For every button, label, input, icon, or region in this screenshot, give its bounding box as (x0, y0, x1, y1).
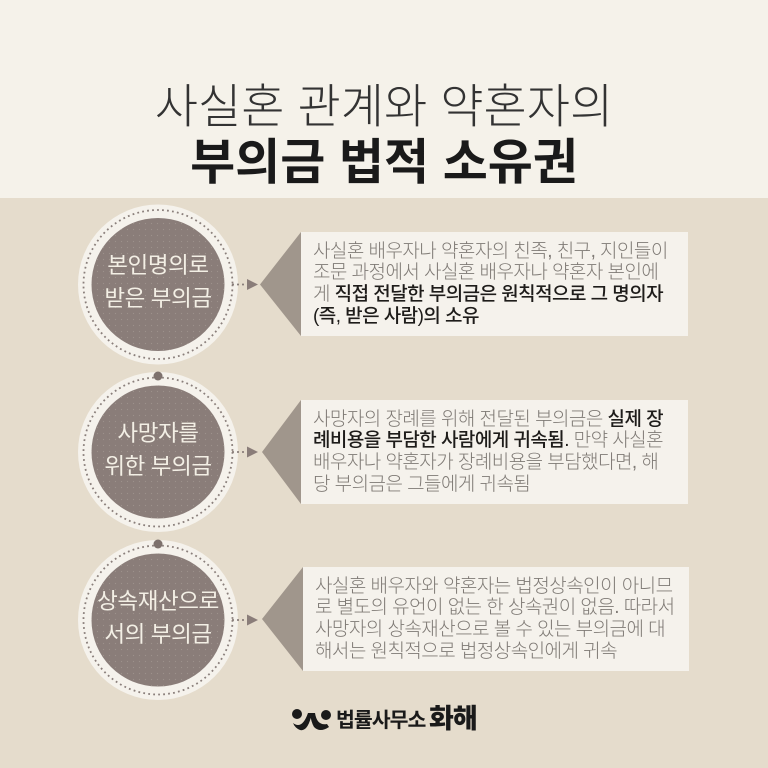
panel 2: 사망자의 장례를 위해 전달된 부의금은 실제 장 (313, 408, 663, 430)
title: 부의금 법적 소유권 (190, 136, 578, 190)
panel 3: 사실혼 배우자와 약혼자는 법정상속인이 아니므 (315, 576, 673, 596)
panel 2 (301, 400, 688, 504)
logo (292, 704, 477, 734)
circle label 3 (97, 589, 219, 647)
panel 2: 배우자나 약혼자가 장례비용을 부담했다면, 해 (313, 452, 658, 473)
title: 사실혼 관계와 약혼자의 (155, 80, 613, 133)
panel 1 (301, 232, 688, 336)
circle 3 (78, 540, 238, 700)
panel 1: (즉, 받은 사람)의 소유 (313, 306, 479, 327)
panel 2: 례비용을 부담한 사람에게 귀속됨. 만약 사실혼 (313, 430, 663, 451)
circle label 1: 본인명의로 (107, 253, 209, 278)
connector 2 (232, 400, 301, 504)
circle label 2: 위한 부의금 (104, 454, 212, 479)
circle label 2: 사망자를 (117, 421, 199, 446)
junction dot 2 (154, 540, 162, 548)
panel 3: 로 별도의 유언이 없는 한 상속권이 없음. 따라서 (315, 597, 675, 618)
circle 1 (78, 204, 238, 364)
icon: logo mark (292, 709, 331, 730)
circle label 1: 받은 부의금 (104, 286, 212, 311)
logo text: 법률사무소 (336, 709, 425, 732)
connector 1 (232, 232, 301, 336)
connector 3 (232, 567, 303, 671)
panel 1: 조문 과정에서 사실혼 배우자나 약혼자 본인에 (313, 262, 658, 283)
circle label 3: 상속재산으로 (97, 589, 219, 614)
title (155, 80, 613, 190)
panel 3 (303, 567, 689, 671)
circle 2 (78, 372, 238, 532)
junction dot 1 (154, 372, 162, 380)
circle label 3: 서의 부의금 (104, 622, 212, 647)
panel 1: 사실혼 배우자나 약혼자의 친족, 친구, 지인들이 (313, 240, 668, 262)
panel 3: 사망자의 상속재산으로 볼 수 있는 부의금에 대 (315, 619, 665, 640)
panel 3: 해서는 원칙적으로 법정상속인에게 귀속 (315, 641, 617, 662)
panel 2: 당 부의금은 그들에게 귀속됨 (313, 474, 530, 495)
circle label 1 (104, 253, 212, 311)
logo name: 화해 (429, 704, 477, 734)
panel 1: 게 직접 전달한 부의금은 원칙적으로 그 명의자 (313, 284, 663, 305)
circle label 2 (104, 421, 212, 479)
title band (0, 0, 768, 198)
